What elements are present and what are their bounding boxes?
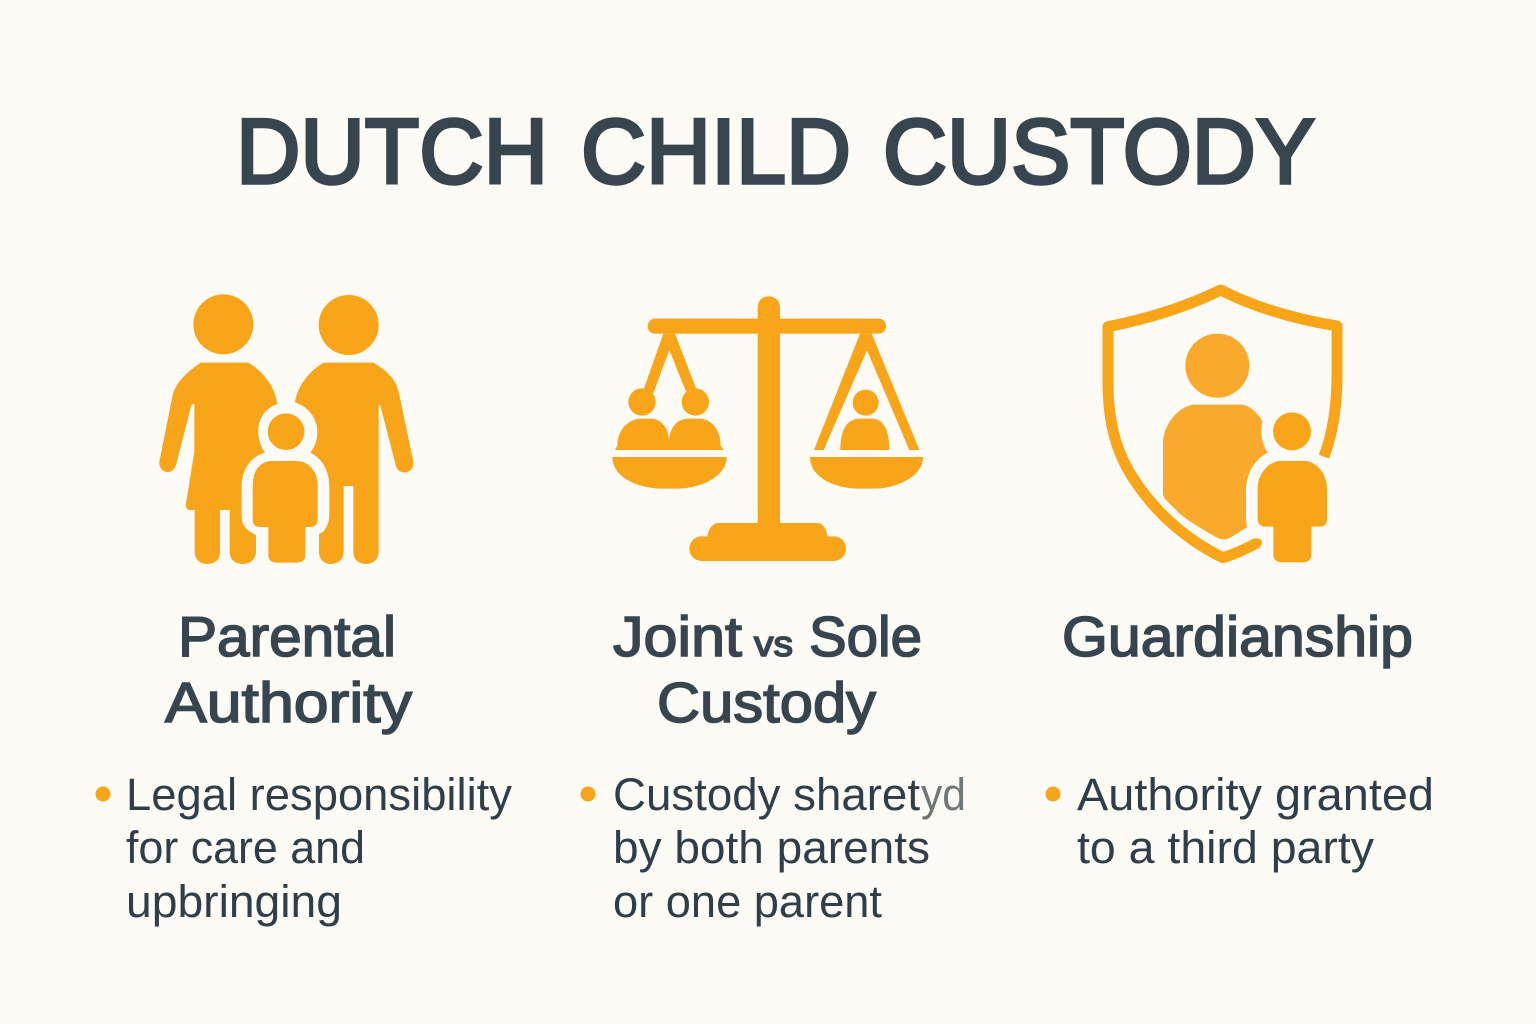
icon: family [159, 294, 413, 564]
heading: parental authority: Authority [165, 671, 413, 735]
title: CUSTODY [883, 101, 1315, 203]
bullet: legal responsibility [96, 769, 512, 927]
panel: parental authority [96, 294, 512, 927]
title [236, 101, 1315, 203]
heading: guardianship: Guardianship [1062, 605, 1413, 669]
bullet: authority granted: Authority granted [1077, 769, 1434, 820]
bullet: custody shared: Custody sharet [613, 769, 920, 820]
heading: joint vs sole custody: Custody [657, 671, 877, 735]
title: DUTCH [236, 101, 548, 203]
bullet: legal responsibility: for care and [126, 822, 365, 873]
panel: guardianship [1046, 290, 1434, 873]
bullet: legal responsibility: Legal responsibility [126, 769, 512, 820]
heading: parental authority [165, 605, 413, 735]
bullet: custody shared: by both parents [613, 822, 930, 873]
bullet: legal responsibility: upbringing [126, 876, 342, 927]
bullet: authority granted: to a third party [1077, 822, 1375, 873]
icon: shield with guardian and child [1108, 290, 1337, 562]
bullet: custody shared [580, 769, 966, 927]
bullet: authority granted [1046, 769, 1434, 873]
title: CHILD [581, 101, 851, 203]
heading: joint vs sole custody [613, 605, 922, 735]
heading: joint vs sole custody: vs [754, 623, 793, 664]
icon: balance scales [612, 296, 923, 561]
heading: joint vs sole custody: Joint [613, 605, 742, 669]
heading: parental authority: Parental [178, 605, 396, 669]
bullet: custody shared: or one parent [613, 876, 882, 927]
panel: joint vs sole custody [580, 296, 966, 927]
bullet: custody shared: yd [921, 769, 966, 820]
heading: joint vs sole custody: Sole [809, 605, 922, 669]
